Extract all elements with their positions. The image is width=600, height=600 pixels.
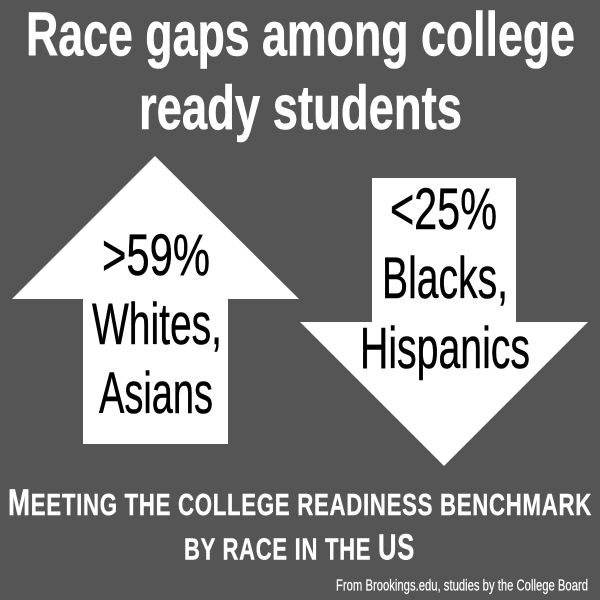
down arrow label: Blacks, (382, 246, 508, 311)
subtitle: BY RACE IN THE US (184, 526, 415, 568)
up arrow label: Asians (99, 361, 213, 426)
down arrow label: <25% (390, 177, 497, 242)
title (26, 0, 575, 143)
title: ready students (139, 74, 462, 143)
down arrow: Blacks and Hispanics (300, 177, 588, 466)
up arrow label (92, 223, 222, 426)
up arrow label: >59% (102, 223, 210, 288)
down arrow label (360, 177, 530, 381)
up arrow label: Whites, (92, 292, 222, 357)
up arrow: whites and Asians (12, 156, 299, 444)
subtitle (8, 482, 592, 568)
